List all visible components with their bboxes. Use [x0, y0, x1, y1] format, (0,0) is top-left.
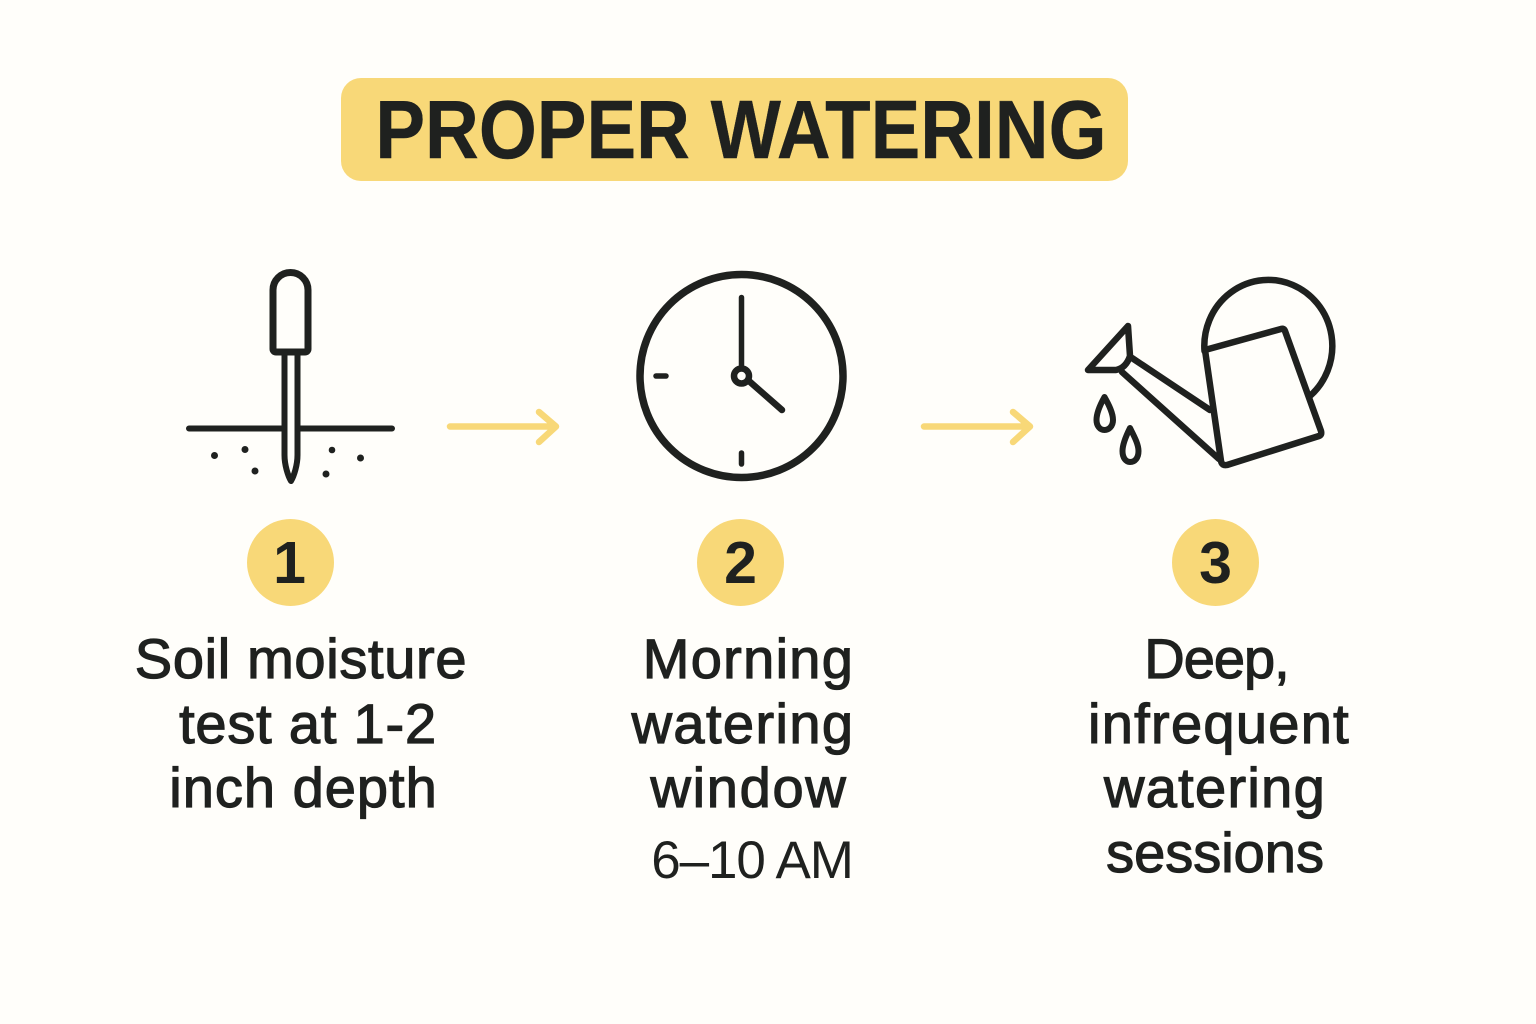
step 3 label — [1088, 627, 1350, 884]
step 1 number badge: 1 — [273, 530, 306, 596]
title banner — [341, 78, 1128, 181]
step 3 label: Deep, — [1144, 627, 1289, 690]
step 2 number badge — [697, 519, 784, 606]
step 2 label: Morning — [643, 627, 854, 690]
step 1 label: test at 1-2 — [179, 692, 437, 755]
step 3 number badge — [1172, 519, 1259, 606]
step 1 number badge — [247, 519, 334, 606]
title text: PROPER WATERING — [375, 83, 1106, 176]
arrow 1 — [450, 412, 556, 442]
arrow 2 — [924, 412, 1030, 442]
step 2 label: watering — [632, 692, 854, 755]
step 3 label: sessions — [1106, 821, 1324, 884]
step 2 number badge: 2 — [724, 530, 757, 596]
step 2 time window: 6–10 AM — [651, 830, 853, 890]
icon: clock — [640, 274, 843, 478]
step 3 label: watering — [1104, 756, 1326, 819]
step 3 number badge: 3 — [1199, 530, 1232, 596]
icon: soil moisture probe — [189, 272, 392, 481]
step 2 label — [630, 627, 854, 819]
step 1 label: Soil moisture — [135, 627, 467, 690]
step 1 label — [135, 627, 467, 820]
step 3 label: infrequent — [1088, 692, 1350, 755]
icon: watering can — [1088, 280, 1332, 465]
step 1 label: inch depth — [169, 756, 438, 819]
step 2 label: window — [651, 756, 847, 819]
